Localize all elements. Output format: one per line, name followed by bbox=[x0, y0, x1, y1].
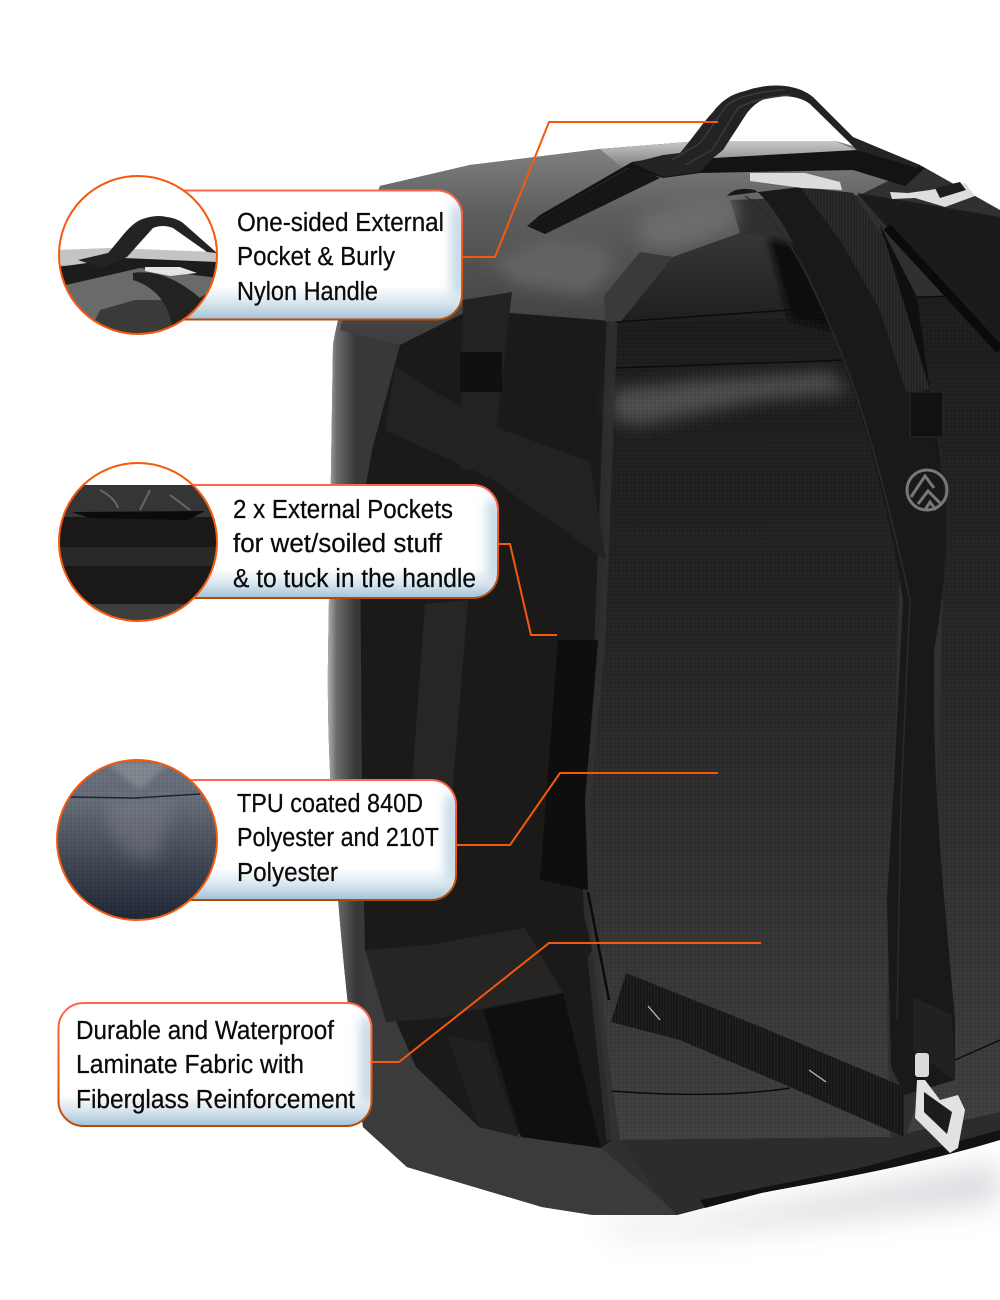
diagonal upper strap bbox=[385, 367, 606, 560]
second strap inner edge bbox=[887, 227, 1000, 350]
label box 4 bbox=[58, 1003, 372, 1126]
thumb gloss highlights bbox=[100, 490, 190, 510]
label text 1: One-sided External bbox=[237, 209, 444, 237]
shoulder strap padding bbox=[727, 187, 955, 1095]
lower tab bbox=[447, 1035, 519, 1137]
label tint 2 bbox=[488, 500, 502, 580]
thumb top surface bbox=[60, 266, 213, 320]
callout 2 bbox=[55, 460, 502, 624]
thumb webbing bbox=[55, 547, 225, 566]
label border 3 bbox=[120, 780, 456, 900]
vertical lower strap bbox=[405, 600, 468, 880]
bag photo bbox=[328, 86, 1000, 1232]
label text 4 bbox=[76, 1017, 355, 1114]
callout 4 bbox=[58, 1003, 375, 1126]
right side panel bbox=[905, 297, 1000, 1140]
strap webbing texture bbox=[611, 973, 904, 1137]
metal buckle left bbox=[750, 173, 842, 190]
flap sheen near strap bbox=[640, 196, 735, 250]
right panel stitch bbox=[917, 296, 1000, 1060]
flap sheen bbox=[490, 238, 615, 295]
label text 2: for wet/soiled stuff bbox=[233, 530, 443, 558]
thumb light back edge bbox=[60, 248, 216, 266]
side handle slot bbox=[540, 640, 598, 890]
thumb handle bbox=[78, 216, 216, 263]
bottom band fabric bbox=[363, 950, 677, 1215]
logo mountains bbox=[911, 476, 940, 510]
label text 2: 2 x External Pockets bbox=[233, 496, 453, 524]
label box 1 bbox=[120, 190, 462, 320]
label text 2 bbox=[233, 496, 476, 593]
thumb buckle bbox=[145, 267, 197, 276]
webbing texture bbox=[800, 187, 930, 392]
thumbnail circle: pockets bbox=[55, 460, 225, 624]
thumb binding bbox=[58, 258, 218, 285]
second shoulder strap bbox=[857, 193, 1000, 350]
thumb strap pad bbox=[133, 272, 206, 325]
stitched pocket seams bbox=[610, 308, 850, 1094]
floor shadow bbox=[600, 1165, 1000, 1232]
logo on strap bbox=[907, 470, 947, 510]
label text 1: Nylon Handle bbox=[237, 278, 378, 306]
thumbnail circle: handle bbox=[55, 176, 218, 340]
strap stitch marks bbox=[648, 1006, 826, 1082]
webbing on shoulder strap bbox=[800, 187, 930, 392]
lower black column bbox=[483, 993, 601, 1148]
label border 2 bbox=[120, 485, 498, 598]
thumb lower sheen bbox=[91, 604, 185, 620]
main back panel bbox=[585, 312, 900, 1140]
dark fold by corner bbox=[604, 252, 673, 322]
lower flap bbox=[620, 1112, 1000, 1215]
label tint 1 bbox=[452, 205, 466, 295]
side panel webbing straps bbox=[365, 292, 606, 1148]
lower diagonal webbing strap bbox=[611, 973, 904, 1137]
strap on right buckle bbox=[935, 182, 966, 198]
left edge highlight strip bbox=[328, 186, 677, 1215]
label tint 3 bbox=[446, 795, 460, 880]
leader line 4 bbox=[372, 943, 761, 1062]
strap edge stitching bbox=[745, 196, 910, 1020]
leader line 2 bbox=[498, 544, 557, 635]
thumb fabric texture bbox=[57, 760, 217, 920]
corner seam bbox=[585, 322, 612, 1140]
light back edge behind handle bbox=[600, 141, 860, 170]
leader line 1 bbox=[463, 122, 718, 257]
label text 3: TPU coated 840D bbox=[237, 790, 423, 818]
label text 3: Polyester and 210T bbox=[237, 824, 439, 852]
pad lower tab bbox=[913, 997, 955, 1080]
label text 4: Laminate Fabric with bbox=[76, 1051, 304, 1079]
upper panel fold bbox=[620, 233, 830, 322]
label text 2: & to tuck in the handle bbox=[233, 565, 476, 593]
thumb white fade bbox=[85, 464, 191, 485]
strap tab bbox=[910, 392, 943, 437]
thumb glossy top bbox=[64, 485, 212, 517]
label text 3: Polyester bbox=[237, 859, 338, 887]
main panel texture bbox=[585, 312, 900, 1140]
thumb pocket slit bbox=[72, 511, 205, 520]
callout 1 bbox=[55, 176, 466, 340]
small buckle bar bbox=[915, 1053, 929, 1077]
thumb top highlight bbox=[109, 761, 166, 790]
black gap behind pad bbox=[880, 225, 945, 500]
side panel bbox=[360, 310, 612, 1148]
shaded area under shoulder strap bbox=[768, 238, 835, 330]
handle body bbox=[632, 86, 920, 177]
thumb lower shadow bbox=[95, 300, 172, 333]
label border 1 bbox=[120, 190, 462, 320]
label box 3 bbox=[120, 780, 456, 900]
label text 1 bbox=[237, 209, 444, 306]
bag body silhouette bbox=[328, 141, 1000, 1215]
metal buckle right bbox=[890, 183, 975, 207]
vertical upper strap bbox=[460, 292, 512, 470]
thumbnail circle: fabric bbox=[57, 760, 217, 920]
metal lower buckle bbox=[915, 1053, 965, 1153]
right panel texture bbox=[905, 297, 1000, 1140]
dark top binding bbox=[527, 150, 925, 226]
label box 2 bbox=[120, 485, 498, 598]
logo circle bbox=[907, 470, 947, 510]
thumb fabric highlight bbox=[108, 804, 169, 863]
folded strap near corner bbox=[530, 890, 592, 990]
label text 3 bbox=[237, 790, 439, 887]
label border 4 bbox=[58, 1003, 372, 1126]
leader line 3 bbox=[456, 773, 718, 845]
buckle tab on strap bbox=[460, 352, 502, 392]
binding left strip bbox=[527, 166, 660, 234]
label tint 4 bbox=[361, 1018, 375, 1103]
top flap bbox=[340, 141, 920, 345]
callout 3 bbox=[57, 760, 460, 920]
lower strap band bbox=[365, 928, 563, 1022]
lower black binding bbox=[700, 1130, 1000, 1208]
main buckle bbox=[915, 1080, 965, 1153]
label text 1: Pocket & Burly bbox=[237, 243, 395, 271]
handle ridges bbox=[672, 90, 790, 165]
strap through buckle bbox=[924, 1092, 952, 1134]
zipper pull bbox=[588, 892, 609, 1000]
main panel sheen bbox=[612, 372, 850, 425]
label text 4: Durable and Waterproof bbox=[76, 1017, 335, 1045]
thumb seam bbox=[70, 794, 200, 798]
label text 4: Fiberglass Reinforcement bbox=[76, 1086, 355, 1114]
nylon handle bbox=[632, 86, 920, 177]
